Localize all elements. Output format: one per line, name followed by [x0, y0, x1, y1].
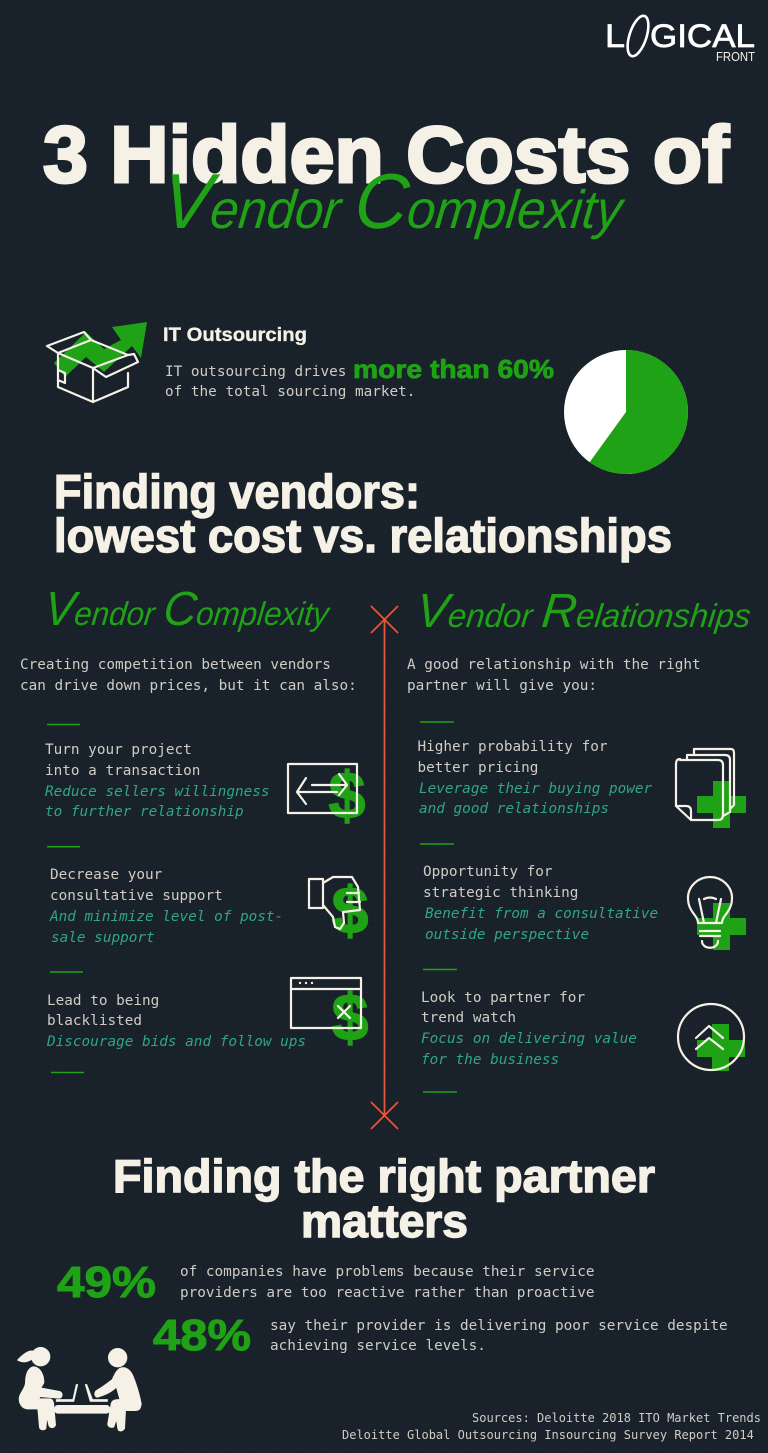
item: trend watch: for the business [421, 1052, 559, 1068]
item: trend watch: trend watch [421, 1010, 516, 1026]
title: 3 Hidden Costs of [43, 110, 729, 199]
item: strategic thinking: Benefit from a consultative [425, 906, 658, 922]
item: decrease support: Decrease your [50, 867, 163, 883]
heading: vendor relationships: Vendor Relationships [414, 584, 754, 638]
subtitle script: Vendor Complexity [158, 158, 630, 245]
heading: finding vendors: Finding vendors: [54, 465, 420, 518]
item: turn your project: Turn your project [45, 742, 192, 758]
item: better pricing: Higher probability for [418, 739, 608, 755]
stat: 48 percent [153, 1311, 728, 1360]
intro: vendor complexity [20, 657, 357, 694]
pie chart: 60 percent [564, 350, 688, 474]
item: better pricing: Leverage their buying power [419, 781, 653, 797]
icon: pages with plus [676, 749, 746, 828]
text: outsourcing statistic: of the total sourcing market. [165, 384, 415, 400]
stat: 48 percent: achieving service levels. [270, 1338, 486, 1354]
heading: finding vendors: lowest cost vs. relationships [54, 509, 672, 562]
heading: finding the right partner [113, 1150, 655, 1247]
stat: 49 percent: providers are too reactive rather than proactive [180, 1285, 595, 1301]
item: turn your project: Reduce sellers willingness [45, 784, 270, 800]
item: turn your project [45, 742, 270, 820]
item: trend watch: Focus on delivering value [421, 1031, 637, 1047]
stat: 49 percent: 49% [57, 1258, 156, 1307]
logo: FRONT [716, 49, 755, 64]
item: decrease support: sale support [51, 930, 155, 946]
icon: thumbs down with dollar [309, 873, 368, 947]
item: turn your project: into a transaction [45, 763, 200, 779]
stat: 48 percent: 48% [153, 1311, 251, 1360]
intro: vendor complexity: can drive down prices, but it can also: [20, 678, 357, 694]
item: blacklisted: Discourage bids and follow ups [46, 1034, 306, 1050]
intro: vendor complexity: Creating competition between vendors [20, 657, 331, 673]
item: trend watch: Look to partner for [421, 990, 585, 1006]
stat: 49 percent [57, 1258, 595, 1307]
icon: browser window with dollar [291, 978, 368, 1054]
item: blacklisted: blacklisted [47, 1013, 142, 1029]
item: strategic thinking: strategic thinking [423, 885, 578, 901]
item: better pricing: and good relationships [419, 801, 609, 817]
logo: GICAL [650, 18, 755, 54]
icon: thumbs down with dollar: $ [332, 873, 368, 947]
text: outsourcing statistic: more than 60% [353, 354, 554, 384]
heading: finding the right partner: matters [301, 1195, 468, 1247]
item: better pricing: better pricing [418, 760, 538, 776]
logo: L [605, 18, 625, 54]
item: blacklisted [46, 993, 306, 1050]
item: strategic thinking: outside perspective [425, 927, 589, 943]
center divider arrow [371, 606, 398, 1129]
item: blacklisted: Lead to being [47, 993, 159, 1009]
heading: finding the right partner: Finding the right partner [113, 1150, 655, 1202]
icon: exchange with dollar [288, 758, 365, 832]
text: outsourcing statistic [165, 354, 554, 400]
icon: exchange with dollar: $ [329, 758, 365, 832]
icon: light bulb with plus [688, 877, 746, 950]
item: better pricing [418, 739, 653, 817]
heading: IT Outsourcing: IT Outsourcing [163, 325, 307, 346]
stat: 49 percent: of companies have problems because their service [180, 1264, 595, 1280]
item: strategic thinking [423, 864, 658, 943]
sources: Deloitte Global Outsourcing Insourcing Survey Report 2014 [342, 1428, 754, 1442]
sources [342, 1411, 761, 1442]
stat: 48 percent: say their provider is delivering poor service despite [270, 1318, 728, 1334]
intro: vendor relationships [407, 657, 701, 694]
sources: Sources: Deloitte 2018 ITO Market Trends [472, 1411, 761, 1425]
item: trend watch [421, 990, 637, 1068]
intro: vendor relationships: A good relationship with the right [407, 657, 701, 673]
text: outsourcing statistic: IT outsourcing drives [165, 364, 346, 380]
item: decrease support [49, 867, 283, 946]
icon: box with rising arrow [47, 322, 147, 402]
item: turn your project: to further relationship [45, 804, 244, 820]
logo [605, 13, 755, 64]
icon: two people at laptops [18, 1348, 141, 1430]
heading: finding vendors [54, 465, 672, 562]
item: strategic thinking: Opportunity for [423, 864, 553, 880]
intro: vendor relationships: partner will give you: [407, 678, 597, 694]
icon: browser window with dollar: $ [332, 980, 368, 1054]
heading: vendor complexity: Vendor Complexity [42, 581, 334, 635]
item: decrease support: And minimize level of post- [49, 909, 283, 925]
item: decrease support: consultative support [50, 888, 223, 904]
icon: chevrons in circle with plus [678, 1004, 745, 1071]
